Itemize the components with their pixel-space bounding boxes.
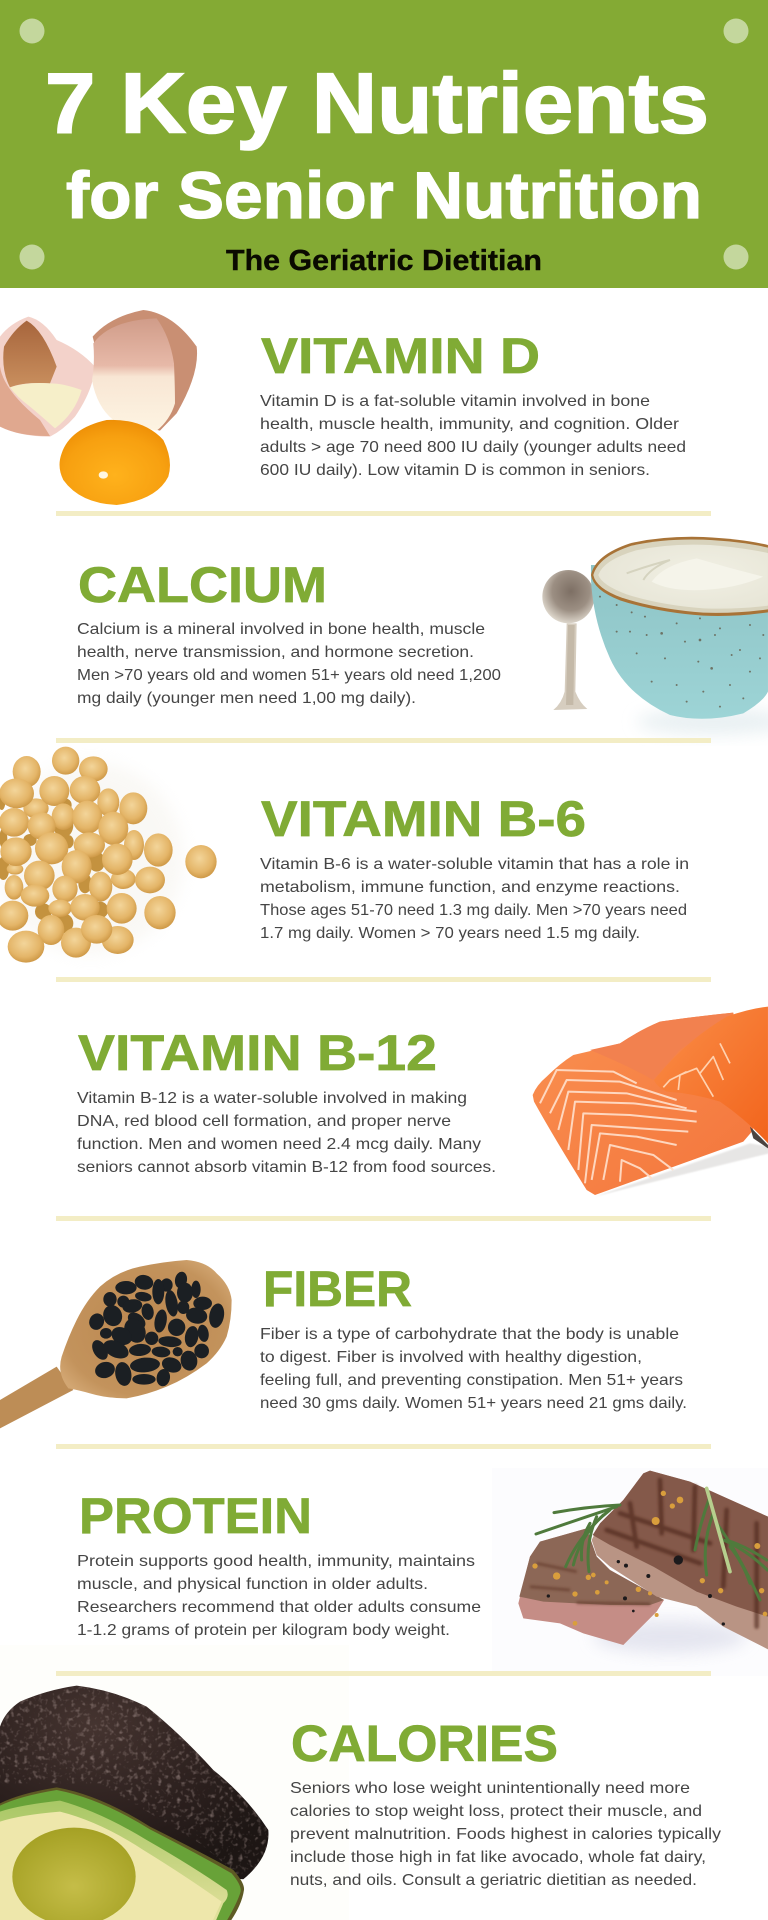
body text: metabolism, immune function, and enzyme reactions.: [260, 879, 680, 896]
body text: Seniors who lose weight unintentionally need more: [290, 1780, 690, 1797]
body text: [290, 1780, 721, 1889]
body text: muscle, and physical function in older adults.: [77, 1576, 428, 1593]
body text: Vitamin D is a fat-soluble vitamin involved in bone: [260, 393, 650, 410]
body text: 1-1.2 grams of protein per kilogram body weight.: [77, 1622, 450, 1639]
panel: vitamin D: [0, 310, 686, 505]
panel: calcium: [77, 537, 768, 735]
heading: VITAMIN B-6: [261, 791, 586, 847]
heading: CALORIES: [291, 1715, 558, 1772]
panel: vitamin B-6: [0, 747, 689, 963]
icon: yogurt cup and spoon: [542, 537, 768, 735]
body text: Protein supports good health, immunity, maintains: [77, 1553, 475, 1570]
body text: feeling full, and preventing constipation. Men 51+ years: [260, 1372, 683, 1389]
icon: avocado: [0, 1686, 268, 1920]
body text: [77, 621, 501, 707]
body text: nuts, and oils. Consult a geriatric dietitian as needed.: [290, 1872, 697, 1889]
icon: black beans on wooden spoon: [0, 1260, 232, 1428]
body text: Researchers recommend that older adults consume: [77, 1599, 481, 1616]
body text: Those ages 51-70 need 1.3 mg daily. Men >70 years need: [260, 902, 687, 919]
panel: calories: [0, 1686, 721, 1920]
body text: function. Men and women need 2.4 mcg daily. Many: [77, 1136, 481, 1153]
body text: [77, 1090, 496, 1176]
heading: VITAMIN B-12: [78, 1025, 437, 1081]
body text: include those high in fat like avocado, whole fat dairy,: [290, 1849, 706, 1866]
corner dot top left: [20, 18, 44, 44]
icon: cracked egg: [0, 310, 197, 505]
body text: [260, 856, 689, 942]
heading: VITAMIN D: [261, 328, 540, 384]
body text: Vitamin B-12 is a water-soluble involved in making: [77, 1090, 467, 1107]
body text: calories to stop weight loss, protect their muscle, and: [290, 1803, 702, 1820]
body text: DNA, red blood cell formation, and proper nerve: [77, 1113, 451, 1130]
icon: grilled steaks with rosemary: [518, 1471, 768, 1653]
heading: CALCIUM: [78, 557, 327, 613]
body text: adults > age 70 need 800 IU daily (younger adults need: [260, 439, 686, 456]
panel: fiber: [0, 1260, 687, 1428]
corner dot bottom left: [20, 244, 44, 270]
body text: [77, 1553, 481, 1639]
heading: FIBER: [263, 1261, 412, 1317]
subtitle: The Geriatric Dietitian: [226, 245, 542, 277]
body text: need 30 gms daily. Women 51+ years need 21 gms daily.: [260, 1395, 687, 1412]
body text: prevent malnutrition. Foods highest in calories typically: [290, 1826, 721, 1843]
corner dot bottom right: [724, 244, 748, 270]
body text: Calcium is a mineral involved in bone health, muscle: [77, 621, 485, 638]
heading: PROTEIN: [79, 1488, 312, 1544]
body text: to digest. Fiber is involved with healthy digestion,: [260, 1349, 642, 1366]
panel: protein: [77, 1471, 768, 1653]
body text: health, nerve transmission, and hormone secretion.: [77, 644, 474, 661]
body text: health, muscle health, immunity, and cognition. Older: [260, 416, 680, 433]
icon: salmon fillets: [533, 1007, 768, 1197]
panel: vitamin B-12: [77, 1007, 768, 1197]
body text: Vitamin B-6 is a water-soluble vitamin that has a role in: [260, 856, 689, 873]
title line 1: 7 Key Nutrients: [45, 56, 709, 152]
body text: mg daily (younger men need 1,00 mg daily).: [77, 690, 416, 707]
corner dot top right: [724, 18, 748, 44]
body text: 600 IU daily). Low vitamin D is common in seniors.: [260, 462, 650, 479]
header banner: [0, 0, 768, 288]
body text: seniors cannot absorb vitamin B-12 from food sources.: [77, 1159, 496, 1176]
body text: [260, 393, 686, 479]
title line 2: for Senior Nutrition: [66, 158, 702, 232]
icon: chickpeas: [0, 747, 217, 963]
body text: 1.7 mg daily. Women > 70 years need 1.5 mg daily.: [260, 925, 640, 942]
faint photo backgrounds: [0, 1468, 768, 1920]
body text: Fiber is a type of carbohydrate that the body is unable: [260, 1326, 679, 1343]
body text: [260, 1326, 687, 1412]
body text: Men >70 years old and women 51+ years old need 1,200: [77, 667, 501, 684]
